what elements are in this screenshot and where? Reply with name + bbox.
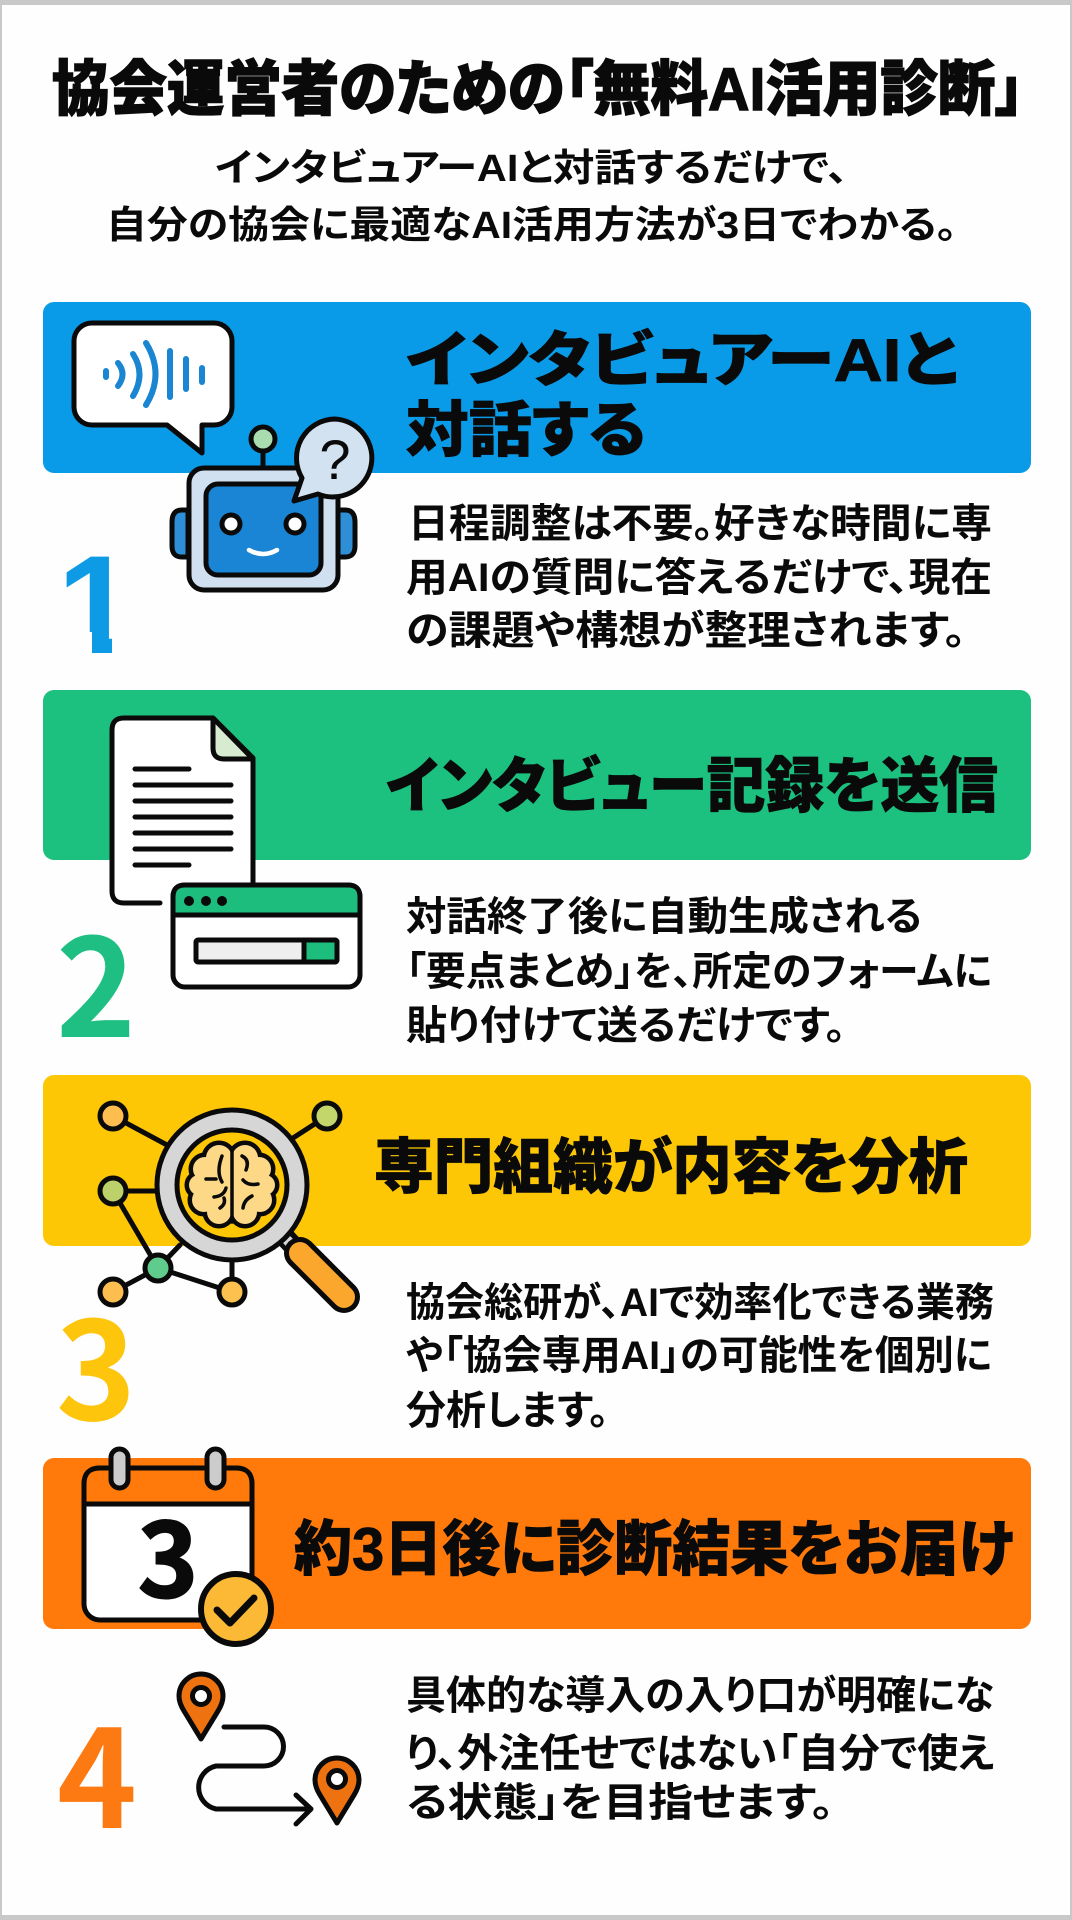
icon: magnifying glass with brain [157,1110,344,1297]
body text: step 4: る状態」を目指せます。 [406,1781,834,1825]
icon: browser form [173,885,360,987]
subtitle: インタビュアーAIと対話するだけで、 [215,148,848,190]
body text: step 1: 日程調整は不要。好きな時間に専 [408,502,992,546]
heading band: step 2 [43,690,1031,860]
body text: step 2: 対話終了後に自動生成される [406,895,922,939]
body text: step 1: 用AIの質問に答えるだけで、現在 [406,556,992,600]
body text: step 3: 分析します。 [406,1389,609,1433]
icon: document [112,718,253,903]
body text: step 2: 「要点まとめ」を、所定のフォームに [406,950,992,994]
title: 協会運営者のための「無料AI活用診断」 [52,56,1024,123]
heading band: step 1 [43,302,1031,473]
body text: step 4: 具体的な導入の入り口が明確にな [406,1674,994,1718]
number 1: 1 [57,526,135,683]
number 2: 2 [56,880,136,1077]
heading: step 1 [406,327,958,464]
icon: calendar: 3 [138,1480,198,1627]
icon: robot with question bubble [172,419,372,590]
icon: network nodes [100,1103,340,1305]
number 3: 3 [56,1263,136,1460]
heading: step 2: インタビュー記録を送信 [386,753,998,820]
body text: step 3 [406,1281,994,1433]
subtitle [106,148,957,247]
icon: voice speech bubble [74,323,232,453]
heading: step 4: 約3日後に診断結果をお届け [294,1516,1014,1583]
number 4: 4 [57,1671,137,1868]
panel: step 4 [43,1449,1031,1868]
heading band: step 4 [43,1458,1031,1629]
body text: step 2 [406,895,992,1048]
panel: step 3 [43,1075,1031,1460]
heading band: step 3 [43,1075,1031,1246]
icon: brain [189,1145,275,1224]
body text: step 3: 協会総研が、AIで効率化できる業務 [406,1281,994,1325]
body text: step 4: り、外注任せではない「自分で使え [406,1732,995,1776]
body text: step 2: 貼り付けて送るだけです。 [406,1004,846,1048]
heading: step 1: 対話する [406,397,646,464]
panel: step 1 [43,302,1031,683]
icon: robot with question bubble: ? [319,428,351,491]
body text: step 1: の課題や構想が整理されます。 [406,609,966,653]
heading: step 3: 専門組織が内容を分析 [374,1134,968,1201]
body text: step 4 [406,1674,995,1825]
icon: check badge [201,1574,271,1644]
subtitle: 自分の協会に最適なAI活用方法が3日でわかる。 [106,205,957,247]
body text: step 1 [406,502,992,653]
body text: step 3: や「協会専用AI」の可能性を個別に [406,1334,992,1378]
icon: calendar [84,1449,271,1644]
panel: step 2 [43,690,1031,1077]
heading: step 1: インタビュアーAIと [406,327,958,394]
icon: route with pins [179,1674,359,1824]
